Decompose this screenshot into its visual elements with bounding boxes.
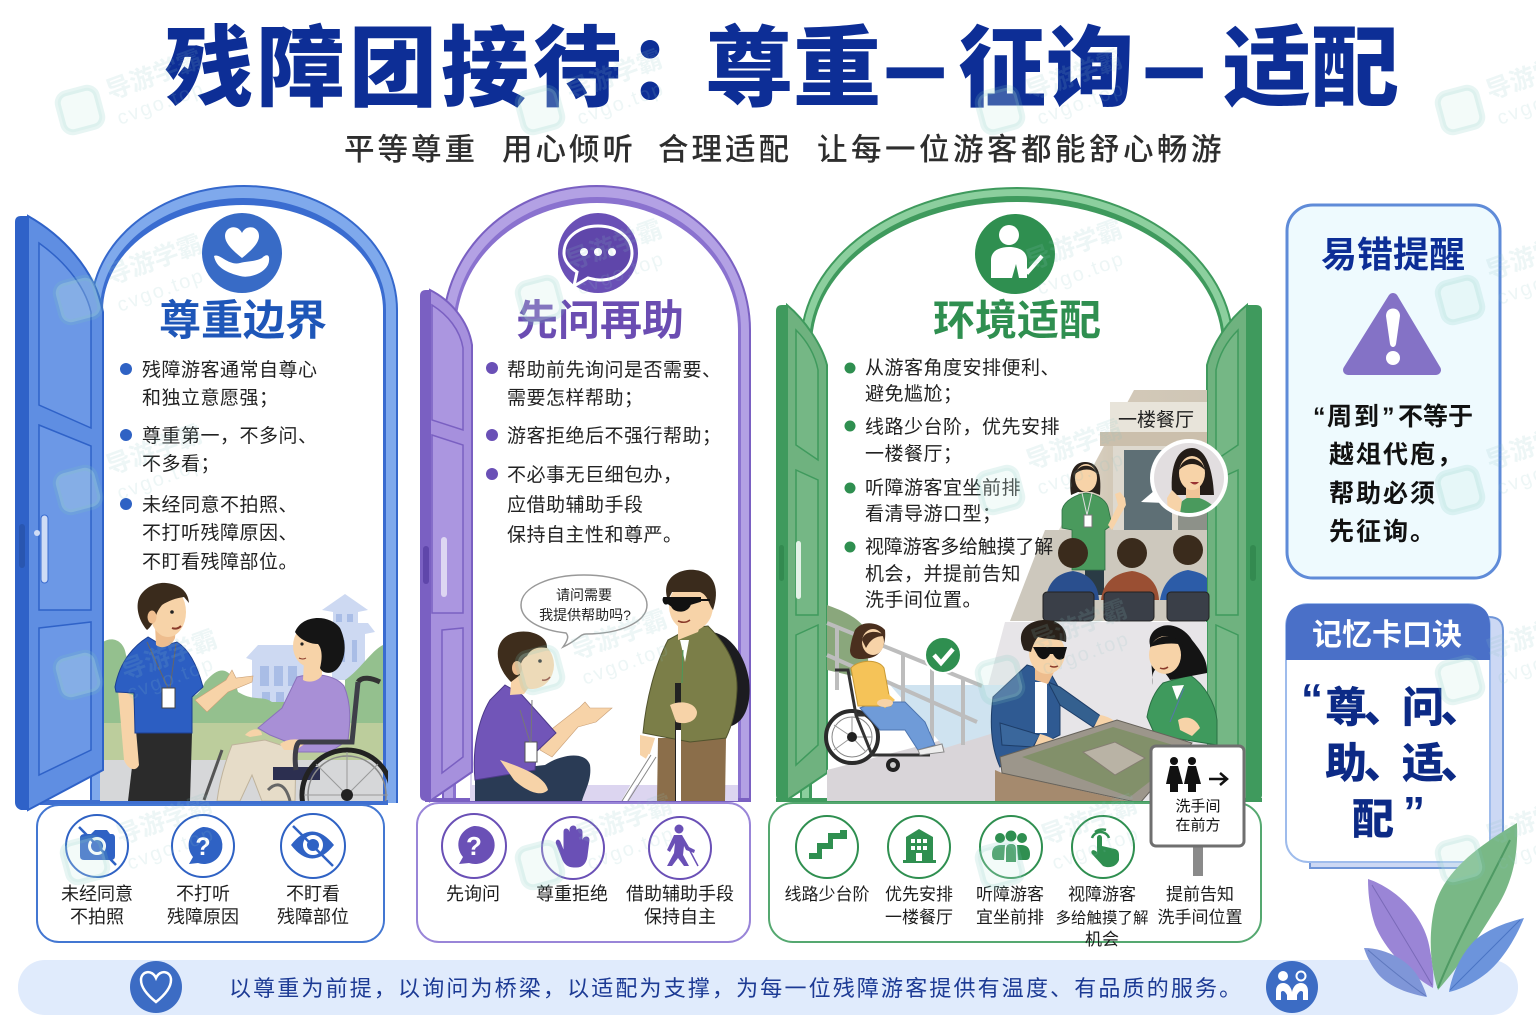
watermarks: cvgo.top: [1034, 448, 1128, 500]
watermarks: cvgo.top: [574, 78, 668, 130]
reminder text: 越俎代庖，: [1329, 441, 1464, 469]
signpost: restroom ahead: 在前方: [1175, 817, 1221, 834]
bullet list: 一楼餐厅；: [865, 443, 963, 465]
watermarks: 导游学霸: [1022, 415, 1126, 476]
mnemonic text: 尊、问、: [1325, 684, 1479, 731]
classroom scene: 一楼餐厅: [1118, 409, 1194, 431]
title: 适配: [1223, 19, 1399, 118]
labels: 残障原因: [167, 907, 239, 927]
labels: 尊重拒绝: [536, 884, 608, 904]
icon: no prying question: ?: [195, 833, 211, 861]
watermarks: 导游学霸: [117, 625, 221, 686]
heading: 先问再助: 先问再助: [516, 297, 684, 344]
speech bubble: [521, 575, 647, 647]
footer message: 以尊重为前提，以询问为桥梁，以适配为支撑，为每一位残障游客提供有温度、有品质的服务。: [229, 976, 1243, 1001]
labels: 提前告知: [1166, 885, 1234, 904]
watermarks: cvgo.top: [574, 248, 668, 300]
bullet list: 尊重第一，不多问、: [142, 425, 318, 447]
mnemonic text: “: [1301, 675, 1323, 724]
illustration: guide talks to wheelchair user: [100, 582, 388, 801]
speech bubble: 我提供帮助吗?: [539, 607, 631, 623]
watermarks: cvgo.top: [1034, 248, 1128, 300]
touch model table: [995, 720, 1192, 803]
labels: 一楼餐厅: [885, 908, 953, 927]
subtitle: [344, 133, 1225, 167]
wheelchair user figure: [202, 618, 388, 801]
bullet list: 未经同意不拍照、: [142, 494, 298, 516]
card header: [1286, 604, 1490, 660]
bullet list: 帮助前先询问是否需要、: [507, 359, 722, 381]
bullet list: 残障游客通常自尊心: [142, 359, 318, 381]
heading: 易错提醒: 易错提醒: [1321, 234, 1465, 275]
icon: two people: [1266, 961, 1318, 1013]
labels: 机会: [1085, 930, 1119, 949]
watermarks: 导游学霸: [102, 230, 206, 291]
watermarks: [54, 45, 1536, 889]
wheelchair: [202, 676, 388, 801]
reminder text: 先征询。: [1329, 518, 1437, 546]
subtitle: 用心倾听: [502, 133, 636, 167]
labels: 借助辅助手段: [626, 884, 734, 904]
watermarks: 导游学霸: [1027, 595, 1131, 656]
watermarks: cvgo.top: [1049, 823, 1143, 875]
callout: sign-language close up: [1141, 439, 1228, 517]
reminder text: 不等于: [1398, 403, 1473, 431]
arch frame purple: [425, 185, 751, 802]
labels: 宜坐前排: [976, 908, 1044, 927]
panel: respect boundaries: [15, 185, 398, 942]
labels: 残障部位: [277, 907, 349, 927]
labels: [446, 884, 734, 927]
ground and model scene: [827, 605, 1207, 801]
background buildings: [246, 594, 375, 712]
bullet list: 不盯看残障部位。: [142, 551, 298, 573]
watermarks: cvgo.top: [584, 823, 678, 875]
labels: [784, 885, 1242, 949]
icon: no prying question: [172, 815, 234, 877]
watermarks: 导游学霸: [572, 790, 676, 851]
classroom scene: [1010, 390, 1209, 621]
illustration: tour scenes: [826, 390, 1217, 803]
title: —: [1144, 16, 1204, 112]
reminder text: 帮助必须: [1329, 480, 1437, 508]
heading: 尊重边界: 尊重边界: [159, 297, 327, 344]
bullet list: 线路少台阶，优先安排: [865, 416, 1060, 438]
watermarks: cvgo.top: [1034, 78, 1128, 130]
mnemonic text: ”: [1403, 788, 1425, 837]
bullet list: 需要怎样帮助；: [507, 387, 644, 409]
subtitle: 合理适配: [658, 133, 792, 167]
watermarks: 导游学霸: [562, 215, 666, 276]
reminder text: “: [1313, 403, 1326, 431]
reminder text: ”: [1382, 403, 1394, 431]
bullet list: 游客拒绝后不强行帮助；: [507, 425, 722, 447]
bullet list: 看清导游口型；: [865, 503, 1002, 525]
watermarks: 导游学霸: [1022, 215, 1126, 276]
signpost: restroom ahead: 洗手间: [1175, 798, 1221, 815]
icon: heart in hand: [202, 213, 282, 293]
mnemonic text: [1301, 675, 1479, 843]
icon: person with check: [975, 214, 1055, 294]
watermarks: cvgo.top: [124, 653, 218, 705]
bullet list: 保持自主性和尊严。: [507, 524, 683, 546]
labels: 先询问: [446, 884, 500, 904]
icon: green check badge: [925, 637, 961, 673]
card header: 记忆卡口诀: [1312, 619, 1462, 652]
mnemonic text: 助、适、: [1325, 740, 1479, 787]
title: [165, 16, 1399, 118]
decorative leaves: [1364, 823, 1524, 997]
panel: ask first: [417, 185, 751, 942]
speech bubble: 请问需要: [556, 587, 612, 603]
icon: group: [980, 816, 1042, 878]
bullet list: 洗手间位置。: [865, 589, 982, 611]
green-shirt guide at model: [1147, 625, 1217, 745]
bullet list: 应借助辅助手段: [507, 494, 644, 516]
wheelchair visitor on ramp: [826, 623, 944, 772]
labels: 洗手间位置: [1158, 908, 1242, 927]
watermarks: 导游学霸: [102, 420, 206, 481]
footer bar: [18, 960, 1518, 1015]
reminder text: [1313, 403, 1473, 546]
subtitle: 平等尊重: [344, 133, 478, 167]
icon: no photo: [66, 815, 128, 877]
arch frame blue: [40, 185, 398, 805]
heading: 环境适配: 环境适配: [933, 297, 1101, 344]
watermarks: cvgo.top: [1039, 628, 1133, 680]
door left blue: [15, 216, 103, 810]
icon: stop hand: [542, 817, 604, 879]
arch frame green: [776, 187, 1262, 802]
bullet list: [486, 359, 722, 546]
title: 征询: [958, 19, 1134, 118]
icon row: three don'ts: [37, 805, 384, 942]
watermarks: 导游学霸: [1037, 790, 1141, 851]
crouching guide: [474, 631, 612, 801]
panel: environment fit: [769, 187, 1262, 949]
illustration: crouching guide and blind visitor: [440, 570, 750, 801]
labels: 视障游客: [1068, 885, 1136, 904]
bullet list: 和独立意愿强；: [142, 387, 279, 409]
watermarks: 导游学霸: [112, 790, 216, 851]
door left green: [776, 305, 827, 801]
bullet list: 听障游客宜坐前排: [865, 477, 1021, 499]
watermarks: 导游学霸: [567, 605, 671, 666]
watermarks: cvgo.top: [124, 823, 218, 875]
labels: 多给触摸了解: [1055, 909, 1149, 927]
mnemonic text: 配: [1352, 796, 1394, 843]
watermarks: 导游学霸: [102, 45, 206, 106]
icon: no staring: [281, 814, 345, 878]
labels: 线路少台阶: [784, 885, 870, 904]
bullet list: 从游客角度安排便利、: [865, 357, 1060, 379]
icon: warning triangle: [1348, 298, 1436, 370]
watermarks: cvgo.top: [114, 265, 208, 317]
signpost: restroom ahead: [1151, 746, 1244, 876]
labels: 不拍照: [70, 907, 124, 927]
labels: 听障游客: [976, 885, 1044, 904]
title: —: [885, 16, 945, 112]
labels: 保持自主: [644, 907, 716, 927]
icon row: five accommodations: [769, 746, 1261, 949]
blue-jacket visitor: [991, 620, 1122, 767]
watermarks: cvgo.top: [114, 78, 208, 130]
blind visitor: [622, 570, 750, 801]
icon: person with cane: [649, 817, 711, 879]
watermarks: cvgo.top: [579, 638, 673, 690]
guide figure: [115, 583, 253, 801]
panel: memory card: [1286, 604, 1503, 868]
bullet list: 不打听残障原因、: [142, 522, 298, 544]
bullet list: [844, 357, 1060, 611]
icon: building: [888, 816, 950, 878]
icon: question bubble: [442, 814, 506, 878]
bullet list: 避免尴尬；: [865, 383, 963, 405]
watermarks: 导游学霸: [562, 45, 666, 106]
title: ：: [628, 19, 716, 118]
labels: [61, 884, 349, 927]
icon: speech bubble: [558, 213, 638, 293]
icon: heart: [130, 961, 182, 1013]
panel: common mistake reminder: [1287, 205, 1500, 578]
bullet list: 视障游客多给触摸了解: [865, 536, 1053, 558]
labels: 不盯看: [286, 884, 340, 904]
watermarks: 导游学霸: [1022, 45, 1126, 106]
icon: touch hand: [1072, 816, 1134, 878]
reminder text: 周到: [1327, 403, 1381, 431]
bullet list: 不必事无巨细包办，: [507, 464, 683, 486]
bullet list: 机会，并提前告知: [865, 563, 1021, 585]
card body: [1286, 604, 1490, 862]
bullet list: 不多看；: [142, 453, 220, 475]
bullet list: [120, 359, 318, 573]
labels: 不打听: [176, 884, 230, 904]
labels: 优先安排: [885, 885, 953, 904]
icon row: ask, respect, aids: [417, 803, 750, 942]
watermarks: cvgo.top: [114, 453, 208, 505]
door left purple: [420, 290, 472, 801]
labels: 未经同意: [61, 884, 133, 904]
title: 尊重: [705, 19, 881, 118]
subtitle: 让每一位游客都能舒心畅游: [817, 133, 1225, 167]
door right green: [1207, 305, 1262, 800]
icon: question bubble: ?: [466, 831, 482, 861]
icon: stairs: [796, 816, 858, 878]
card back page: [1310, 617, 1503, 868]
title: 残障团接待: [165, 19, 625, 118]
